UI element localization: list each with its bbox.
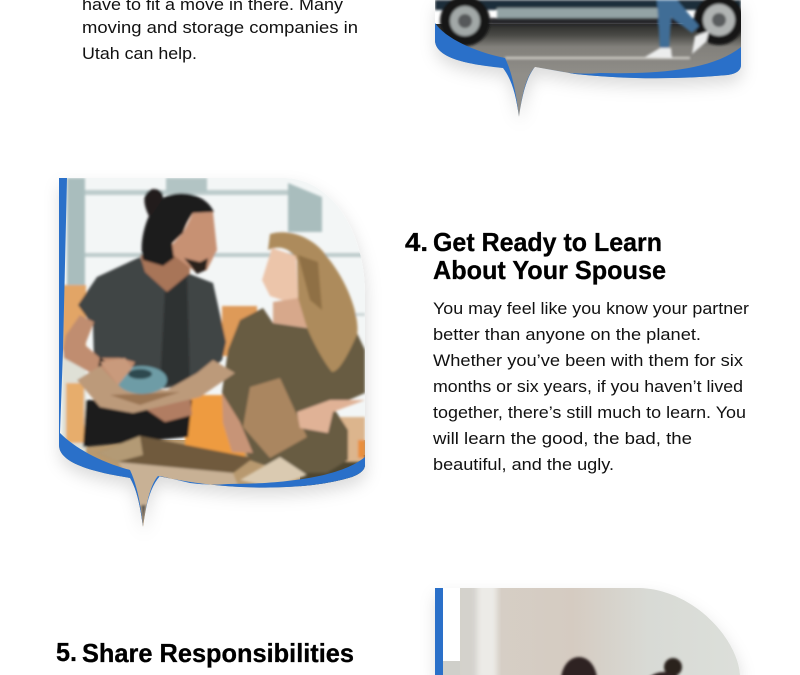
photo bubble: couple unpacking — [59, 178, 365, 530]
step 4 body text: better than anyone on the planet. — [433, 325, 701, 344]
step 5 heading: 5. — [56, 637, 77, 667]
top text block: end of step 3: moving and storage companies in — [82, 18, 358, 37]
blue accent: room bubble — [435, 588, 443, 675]
man's hair — [142, 193, 214, 266]
window frames — [67, 178, 85, 290]
man's shirt — [78, 257, 226, 395]
man's arm and hands — [63, 315, 135, 388]
step 4 body text — [432, 299, 749, 474]
photo bubble: van and walking person — [435, 0, 744, 120]
orange boxes and wall — [62, 285, 86, 355]
woman's face and neck — [262, 248, 298, 302]
paper bag and woman's hands — [222, 393, 253, 453]
step 4 body text: You may feel like you know your partner — [433, 299, 749, 318]
woman's hair — [268, 232, 358, 372]
step 4 heading: About Your Spouse — [433, 255, 666, 285]
man's neck, face — [140, 250, 190, 292]
cardboard box — [97, 436, 253, 473]
woman's shirt — [222, 308, 365, 473]
photo bubble: two people in a bright room — [435, 580, 740, 675]
step 4 heading: 4. — [405, 227, 428, 257]
top text block: end of step 3: Utah can help. — [82, 44, 197, 63]
man's dark undershirt — [83, 400, 192, 447]
step 4 body text: beautiful, and the ugly. — [433, 455, 614, 474]
top text block: end of step 3 — [82, 0, 358, 63]
blue accent: couple bubble — [59, 178, 365, 527]
step 4 body text: months or six years, if you haven’t lived — [433, 377, 743, 396]
step 4 heading — [405, 227, 666, 285]
step 4 body text: together, there’s still much to learn. You — [433, 403, 746, 422]
step 4 body text: will learn the good, the bad, the — [432, 429, 692, 448]
blue accent: van bubble — [435, 23, 741, 117]
step 4 heading: Get Ready to Learn — [433, 227, 662, 257]
paper and vase — [77, 360, 235, 413]
step 5 heading: Share Responsibilities — [82, 638, 354, 668]
step 4 body text: Whether you’ve been with them for six — [433, 351, 744, 370]
